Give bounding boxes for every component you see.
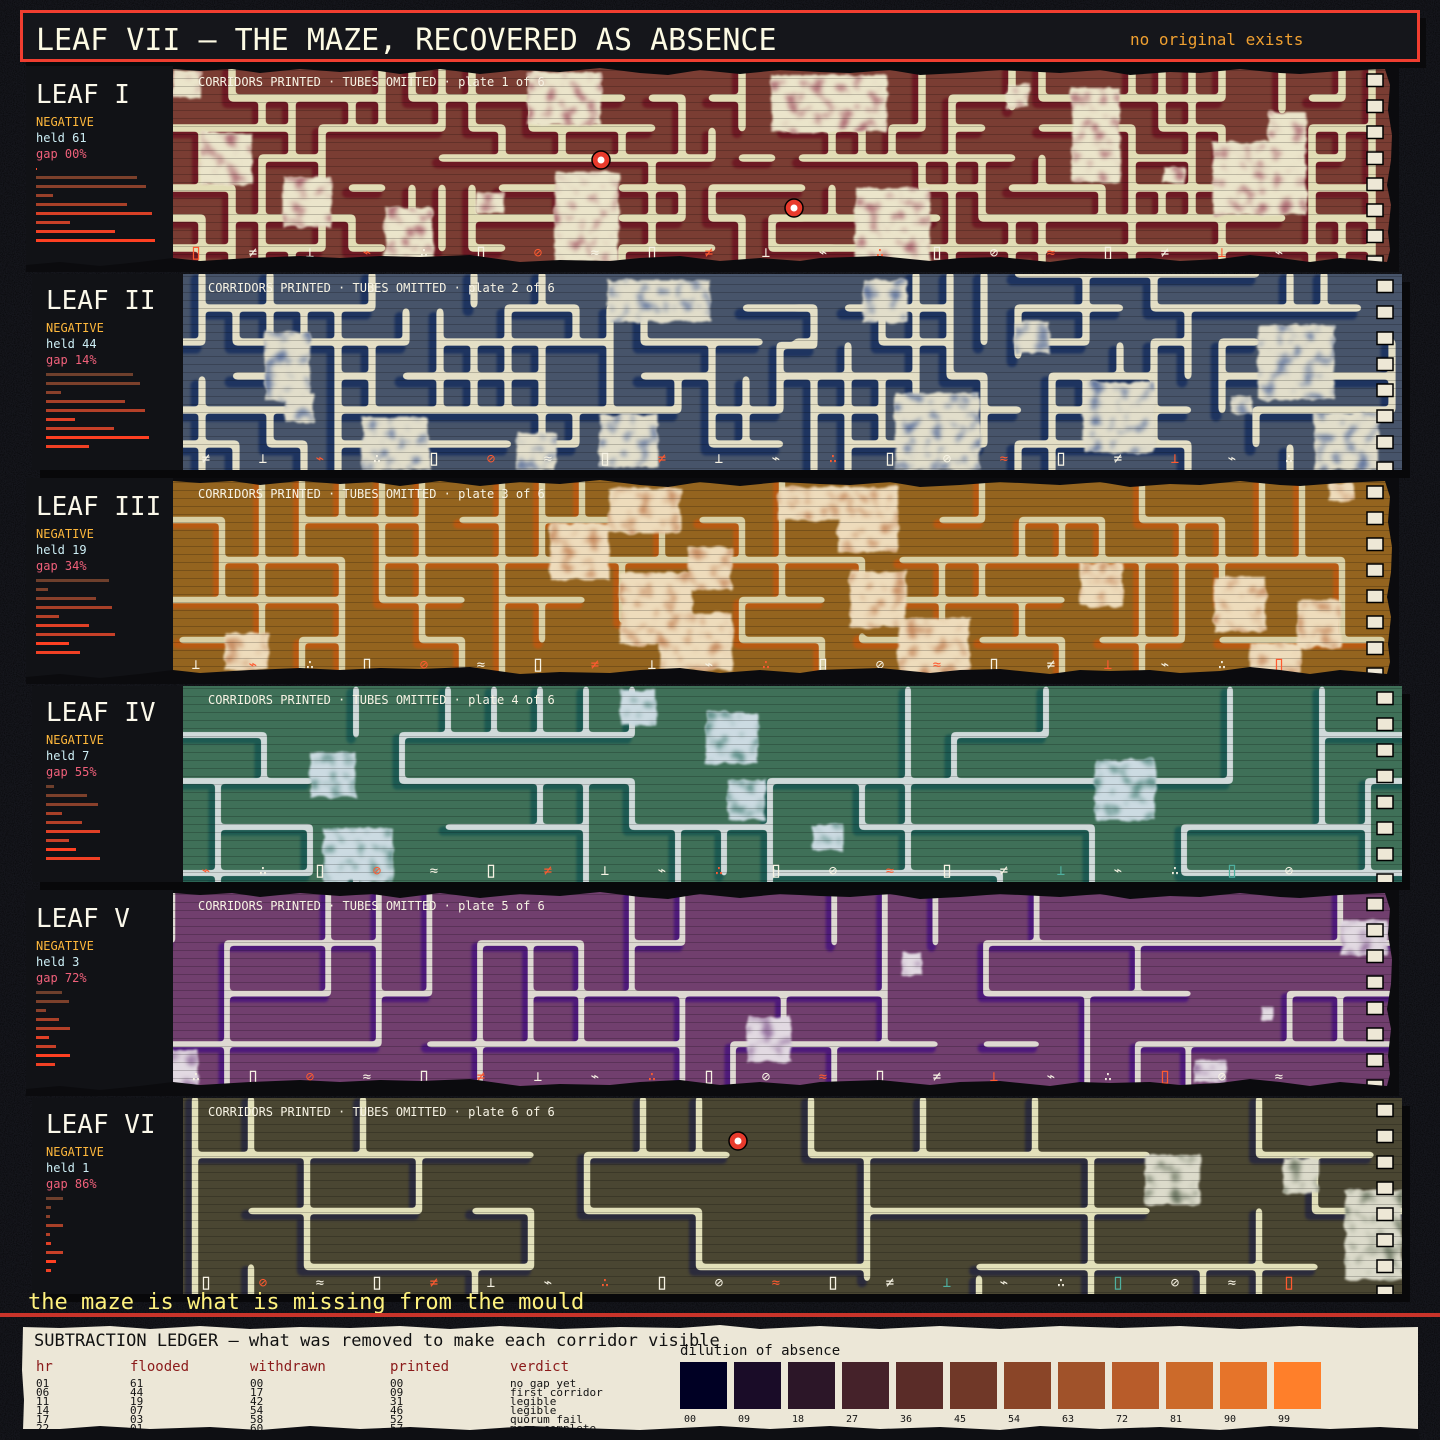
glyph row: ⊥	[943, 1275, 951, 1291]
sidebar: leaf V: gap 72%	[36, 971, 87, 985]
sidebar: leaf VI: NEGATIVE	[46, 1145, 104, 1159]
glyph row: ≠	[1047, 657, 1055, 673]
dilution legend: 90	[1224, 1414, 1236, 1425]
glyph row: ▯	[484, 858, 498, 883]
glyph row: ⊥	[1104, 657, 1112, 673]
ledger table: hr	[36, 1359, 53, 1375]
ledger table: 14	[36, 1404, 50, 1417]
glyph row: ≠	[1000, 863, 1008, 879]
glyph row: ▯	[1111, 1270, 1125, 1295]
sidebar: leaf III: LEAF III	[36, 492, 161, 522]
glyph row: ⌁	[1161, 657, 1169, 673]
ledger table: first corridor	[510, 1386, 603, 1399]
sidebar: leaf I: NEGATIVE	[36, 115, 94, 129]
red divider	[0, 1313, 1440, 1317]
ledger table: 01	[130, 1422, 143, 1435]
glyph row: ▯	[360, 652, 374, 677]
title banner: no original exists	[1130, 30, 1303, 49]
glyph row: ∴	[876, 245, 884, 261]
sidebar: leaf I	[36, 80, 155, 242]
glyph row: ∴	[648, 1069, 656, 1085]
glyph row: ≈	[1000, 451, 1008, 467]
ledger table: 31	[390, 1395, 403, 1408]
glyph row: ∴	[420, 245, 428, 261]
ledger table: 57	[390, 1422, 403, 1435]
glyph row: ≠	[477, 1069, 485, 1085]
sidebar: leaf I: gap 00%	[36, 147, 87, 161]
glyph row: ▯	[531, 652, 545, 677]
glyph row: ⊥	[306, 245, 314, 261]
dilution legend: 54	[1008, 1414, 1020, 1425]
ledger table: 44	[130, 1386, 144, 1399]
glyph row: ⊘	[259, 1275, 268, 1291]
glyph row: ⌁	[772, 451, 780, 467]
glyph row: ▯	[1272, 652, 1286, 677]
glyph row: ≠	[705, 245, 713, 261]
glyph row: ⌁	[316, 451, 324, 467]
ledger table: 60	[250, 1422, 263, 1435]
torn edge	[26, 478, 1399, 684]
marker	[785, 199, 803, 217]
glyph row: ⌁	[544, 1275, 552, 1291]
dilution legend: 81	[1170, 1414, 1182, 1425]
glyph row: ⊘	[943, 451, 952, 467]
glyph row: ⊘	[829, 863, 838, 879]
maze plate II	[183, 274, 1402, 470]
glyph row: ⊘	[534, 245, 543, 261]
sidebar: leaf II: LEAF II	[46, 286, 156, 316]
sidebar: leaf V: held 3	[36, 955, 79, 969]
glyph row: ⊥	[601, 863, 609, 879]
sidebar: leaf IV: LEAF IV	[46, 698, 156, 728]
glyph row: ≈	[544, 451, 552, 467]
glyph row: ∴	[373, 451, 381, 467]
ledger table: quorum fail	[510, 1413, 583, 1426]
glyph row: ▯	[427, 446, 441, 471]
sprocket holes	[1377, 692, 1393, 886]
glyph row: ≈	[933, 657, 941, 673]
glyph row: ⊘	[762, 1069, 771, 1085]
glyph row: ⌁	[1000, 1275, 1008, 1291]
ledger table: 42	[250, 1395, 263, 1408]
glyph row: ⊥	[715, 451, 723, 467]
dilution legend: 18	[792, 1414, 804, 1425]
glyph row: ≠	[1114, 451, 1122, 467]
dilution legend: 63	[1062, 1414, 1074, 1425]
glyph row: ⊘	[1285, 863, 1294, 879]
glyph row: ⌁	[202, 863, 210, 879]
glyph row: ≈	[316, 1275, 324, 1291]
ledger table: 07	[130, 1404, 143, 1417]
glyph row: ≈	[430, 863, 438, 879]
sidebar: leaf V	[36, 904, 130, 1066]
ledger table: 22	[36, 1422, 49, 1435]
sidebar: leaf III: NEGATIVE	[36, 527, 94, 541]
sidebar: leaf II: NEGATIVE	[46, 321, 104, 335]
glyph row: ⌁	[363, 245, 371, 261]
glyph row	[192, 246, 1282, 260]
glyph row: ⊘	[420, 657, 429, 673]
ledger heading: SUBTRACTION LEDGER — what was removed to make each corridor visible	[34, 1331, 720, 1351]
caption: the maze is what is missing: the maze is what is missing from the mould	[28, 1290, 584, 1315]
glyph row: ⊥	[762, 245, 770, 261]
ledger table: 52	[390, 1413, 403, 1426]
glyph row: ⊥	[1171, 451, 1179, 467]
sidebar: leaf VI: gap 86%	[46, 1177, 97, 1191]
glyph row: ▯	[1101, 240, 1115, 265]
glyph row: ▯	[1054, 446, 1068, 471]
glyph row: ≈	[591, 245, 599, 261]
ledger table: 58	[250, 1413, 263, 1426]
glyph row: ≈	[886, 863, 894, 879]
glyph row: ≈	[363, 1069, 371, 1085]
glyph row: ⊥	[648, 657, 656, 673]
glyph row: ≠	[933, 1069, 941, 1085]
glyph row: ≈	[819, 1069, 827, 1085]
glyph row	[202, 452, 1292, 466]
glyph row: ▯	[930, 240, 944, 265]
dilution legend: 09	[738, 1414, 750, 1425]
maze plate I	[173, 68, 1392, 262]
sidebar: leaf II: gap 14%	[46, 353, 97, 367]
glyph row: ▯	[474, 240, 488, 265]
ledger table: 00	[390, 1377, 403, 1390]
glyph row: ▯	[769, 858, 783, 883]
ledger table: maze complete	[510, 1422, 596, 1435]
ledger table: legible	[510, 1395, 556, 1408]
sprocket holes	[1367, 898, 1383, 1092]
glyph row: ≠	[249, 245, 257, 261]
sidebar: leaf VI: LEAF VI	[46, 1110, 156, 1140]
glyph row: ▯	[1225, 858, 1239, 883]
title banner: LEAF VII — THE MAZE, RECOVERED AS ABSENCE	[36, 23, 777, 58]
maze plate III	[173, 480, 1392, 674]
glyph row: ≈	[772, 1275, 780, 1291]
glyph row: ⊥	[990, 1069, 998, 1085]
ledger table: 09	[390, 1386, 403, 1399]
glyph row: ⌁	[1114, 863, 1122, 879]
leaf VI	[32, 1098, 1410, 1302]
ledger table: legible	[510, 1404, 556, 1417]
glyph row: ∴	[601, 1275, 609, 1291]
plate caption: CORRIDORS PRINTED · TUBES OMITTED · plate 1 of 6	[198, 75, 545, 89]
sprocket holes	[1367, 486, 1383, 680]
glyph row: ▯	[1282, 1270, 1296, 1295]
glyph row: ⊘	[306, 1069, 315, 1085]
maze plate VI	[183, 1098, 1402, 1294]
glyph row: ∴	[1057, 1275, 1065, 1291]
glyph row: ∴	[829, 451, 837, 467]
sidebar: leaf II: held 44	[46, 337, 97, 351]
glyph row: ⊥	[487, 1275, 495, 1291]
glyph row: ▯	[655, 1270, 669, 1295]
dilution legend: 99	[1278, 1414, 1290, 1425]
plate caption: CORRIDORS PRINTED · TUBES OMITTED · plate 5 of 6	[198, 899, 545, 913]
sprocket holes	[1377, 280, 1393, 474]
glyph row: ⌁	[658, 863, 666, 879]
leaf IV	[32, 686, 1410, 890]
glyph row: ⊥	[192, 657, 200, 673]
glyph row: ≈	[1275, 1069, 1283, 1085]
ledger table: 00	[250, 1377, 263, 1390]
ledger table: 46	[390, 1404, 403, 1417]
glyph row: ≠	[1161, 245, 1169, 261]
ledger table: withdrawn	[250, 1359, 326, 1375]
ledger table	[36, 1359, 603, 1435]
glyph row: ≈	[477, 657, 485, 673]
sidebar: leaf IV	[46, 698, 156, 860]
glyph row: ∴	[1285, 451, 1293, 467]
dilution legend: 45	[954, 1414, 966, 1425]
glyph row: ▯	[199, 1270, 213, 1295]
glyph row	[192, 658, 1282, 672]
sidebar: leaf II	[46, 286, 156, 448]
glyph row: ▯	[189, 240, 203, 265]
ledger table: 61	[130, 1377, 143, 1390]
glyph row: ⊘	[373, 863, 382, 879]
glyph row: ▯	[883, 446, 897, 471]
ledger table: 01	[36, 1377, 49, 1390]
glyph row: ≈	[1228, 1275, 1236, 1291]
glyph row: ∴	[762, 657, 770, 673]
ledger table: 17	[250, 1386, 263, 1399]
dilution legend: 00	[684, 1414, 696, 1425]
glyph row: ▯	[826, 1270, 840, 1295]
glyph row: ⊥	[1057, 863, 1065, 879]
sidebar: leaf IV: gap 55%	[46, 765, 97, 779]
glyph row: ≠	[544, 863, 552, 879]
glyph row: ∴	[259, 863, 267, 879]
glyph row: ▯	[702, 1064, 716, 1089]
plate caption: CORRIDORS PRINTED · TUBES OMITTED · plate 4 of 6	[208, 693, 555, 707]
glyph row: ⌁	[1047, 1069, 1055, 1085]
leaf III	[26, 478, 1399, 696]
leaf II	[32, 274, 1410, 478]
glyph row: ▯	[246, 1064, 260, 1089]
glyph row	[202, 864, 1293, 878]
glyph row: ⌁	[1228, 451, 1236, 467]
sidebar: leaf IV: held 7	[46, 749, 89, 763]
glyph row: ∴	[306, 657, 314, 673]
torn lower edge	[20, 1426, 1420, 1440]
marker	[729, 1132, 747, 1150]
glyph row: ▯	[313, 858, 327, 883]
ledger table: 17	[36, 1413, 49, 1426]
glyph row: ⌁	[705, 657, 713, 673]
glyph row: ∴	[192, 1069, 200, 1085]
sidebar: leaf III: gap 34%	[36, 559, 87, 573]
glyph row: ▯	[816, 652, 830, 677]
ledger table: 06	[36, 1386, 49, 1399]
glyph row: ⊥	[534, 1069, 542, 1085]
leaf V	[26, 890, 1399, 1099]
maze plate IV	[183, 686, 1402, 882]
plate caption: CORRIDORS PRINTED · TUBES OMITTED · plate 2 of 6	[208, 281, 555, 295]
glyph row: ▯	[645, 240, 659, 265]
sidebar: leaf VI	[46, 1110, 156, 1272]
glyph row	[202, 1276, 1292, 1290]
glyph row: ⊘	[990, 245, 999, 261]
glyph row: ⌁	[1275, 245, 1283, 261]
plate caption: CORRIDORS PRINTED · TUBES OMITTED · plate 6 of 6	[208, 1105, 555, 1119]
sidebar: leaf V: NEGATIVE	[36, 939, 94, 953]
leaf I	[26, 66, 1399, 283]
ledger table: flooded	[130, 1359, 189, 1375]
glyph row: ▯	[940, 858, 954, 883]
glyph row: ∴	[1104, 1069, 1112, 1085]
subtraction ledger	[20, 1325, 1420, 1440]
glyph row: ⊘	[876, 657, 885, 673]
glyph row: ▯	[873, 1064, 887, 1089]
glyph row: ⊥	[1218, 245, 1226, 261]
marker	[592, 151, 610, 169]
glyph row: ⌁	[819, 245, 827, 261]
ledger table: no gap yet	[510, 1377, 576, 1390]
ledger table: verdict	[510, 1359, 569, 1375]
dilution legend	[680, 1343, 1321, 1425]
sidebar: leaf I: LEAF I	[36, 80, 130, 110]
glyph row: ⊘	[1218, 1069, 1227, 1085]
glyph row: ∴	[715, 863, 723, 879]
sidebar: leaf IV: NEGATIVE	[46, 733, 104, 747]
glyph row: ▯	[417, 1064, 431, 1089]
glyph row: ⌁	[249, 657, 257, 673]
dilution legend: 36	[900, 1414, 912, 1425]
glyph row: ⌁	[591, 1069, 599, 1085]
ledger table: printed	[390, 1359, 449, 1375]
torn edge	[26, 890, 1399, 1096]
plate caption: CORRIDORS PRINTED · TUBES OMITTED · plate 3 of 6	[198, 487, 545, 501]
glyph row: ≠	[886, 1275, 894, 1291]
glyph row: ≈	[1047, 245, 1055, 261]
dilution legend: 27	[846, 1414, 858, 1425]
sidebar: leaf VI: held 1	[46, 1161, 89, 1175]
title banner	[22, 12, 1426, 68]
glyph row: ▯	[598, 446, 612, 471]
sprocket holes	[1377, 1104, 1393, 1298]
sidebar: leaf I: held 61	[36, 131, 87, 145]
dilution legend: dilution of absence	[680, 1343, 840, 1359]
glyph row: ⊘	[487, 451, 496, 467]
sprocket holes	[1367, 74, 1383, 268]
glyph row: ≠	[658, 451, 666, 467]
glyph row: ≠	[202, 451, 210, 467]
dilution legend: 72	[1116, 1414, 1128, 1425]
glyph row: ▯	[370, 1270, 384, 1295]
glyph row: ⊥	[259, 451, 267, 467]
glyph row: ∴	[1218, 657, 1226, 673]
ledger table: 03	[130, 1413, 143, 1426]
sidebar: leaf III: held 19	[36, 543, 87, 557]
glyph row: ≠	[591, 657, 599, 673]
ledger table: 19	[130, 1395, 143, 1408]
ledger table: 54	[250, 1404, 264, 1417]
sidebar: leaf III	[36, 492, 161, 654]
glyph row	[193, 1070, 1283, 1084]
torn edge	[26, 66, 1399, 272]
glyph row: ≠	[430, 1275, 438, 1291]
maze plate V	[167, 892, 1392, 1099]
glyph row: ⊘	[1171, 1275, 1180, 1291]
glyph row: ∴	[1171, 863, 1179, 879]
sidebar: leaf V: LEAF V	[36, 904, 130, 934]
glyph row: ⊘	[715, 1275, 724, 1291]
glyph row: ▯	[1158, 1064, 1172, 1089]
ledger table: 11	[36, 1395, 49, 1408]
glyph row: ▯	[987, 652, 1001, 677]
